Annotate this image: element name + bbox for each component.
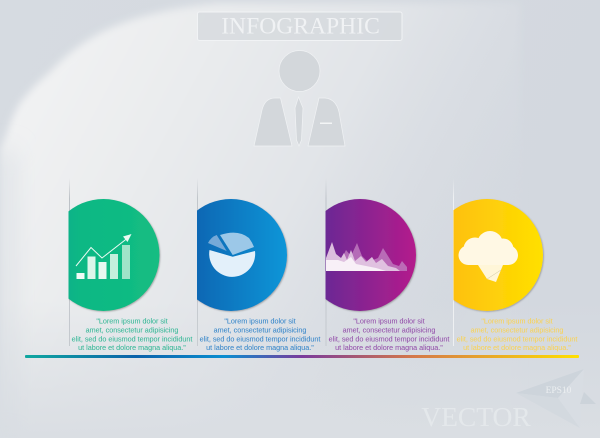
icon: pie chart (208, 233, 255, 277)
text block: elit, sed do eiusmod tempor incididunt (200, 334, 320, 343)
fold line (326, 178, 327, 346)
text block: "Lorem ipsum dolor sit (96, 316, 168, 326)
title box: INFOGRAPHIC (221, 14, 380, 40)
panel: green chart (68, 182, 192, 352)
gradient rule (25, 355, 579, 358)
panel: yellow cloud (453, 185, 578, 352)
icon: growth chart (76, 234, 132, 279)
green circle (68, 199, 161, 312)
text block: amet, consectetur adipisicing (86, 326, 178, 334)
text block: amet, consectetur adipisicing (471, 326, 563, 334)
fold line (69, 178, 70, 346)
icon: businessman (254, 50, 345, 146)
purple circle (326, 199, 418, 312)
text block: "Lorem ipsum dolor sit (224, 316, 296, 326)
yellow circle (454, 199, 544, 312)
background (0, 2, 432, 400)
text block: elit, sed do eiusmod tempor incididunt (329, 334, 449, 343)
text block: "Lorem ipsum dolor sit (481, 316, 553, 326)
text block: ut labore et dolore magna aliqua." (335, 343, 443, 352)
fold line (453, 178, 454, 346)
text block: elit, sed do eiusmod tempor incididunt (72, 334, 192, 343)
label: VECTOR: VECTOR (421, 401, 531, 432)
text block: amet, consectetur adipisicing (343, 326, 435, 334)
fold line (197, 178, 198, 346)
icon: cloud (458, 231, 518, 282)
icon: area chart (326, 242, 407, 271)
panel: purple area chart (326, 183, 450, 352)
text block: "Lorem ipsum dolor sit (353, 316, 425, 326)
blue circle (197, 199, 288, 312)
icon: paper plane (516, 369, 596, 428)
text block: elit, sed do eiusmod tempor incididunt (457, 334, 577, 343)
label: EPS10: EPS10 (546, 386, 572, 396)
text block: ut labore et dolore magna aliqua." (463, 343, 571, 352)
text block: amet, consectetur adipisicing (214, 326, 306, 334)
text block: ut labore et dolore magna aliqua." (206, 343, 314, 352)
text block: ut labore et dolore magna aliqua." (78, 343, 186, 352)
panel: blue pie (197, 182, 320, 352)
